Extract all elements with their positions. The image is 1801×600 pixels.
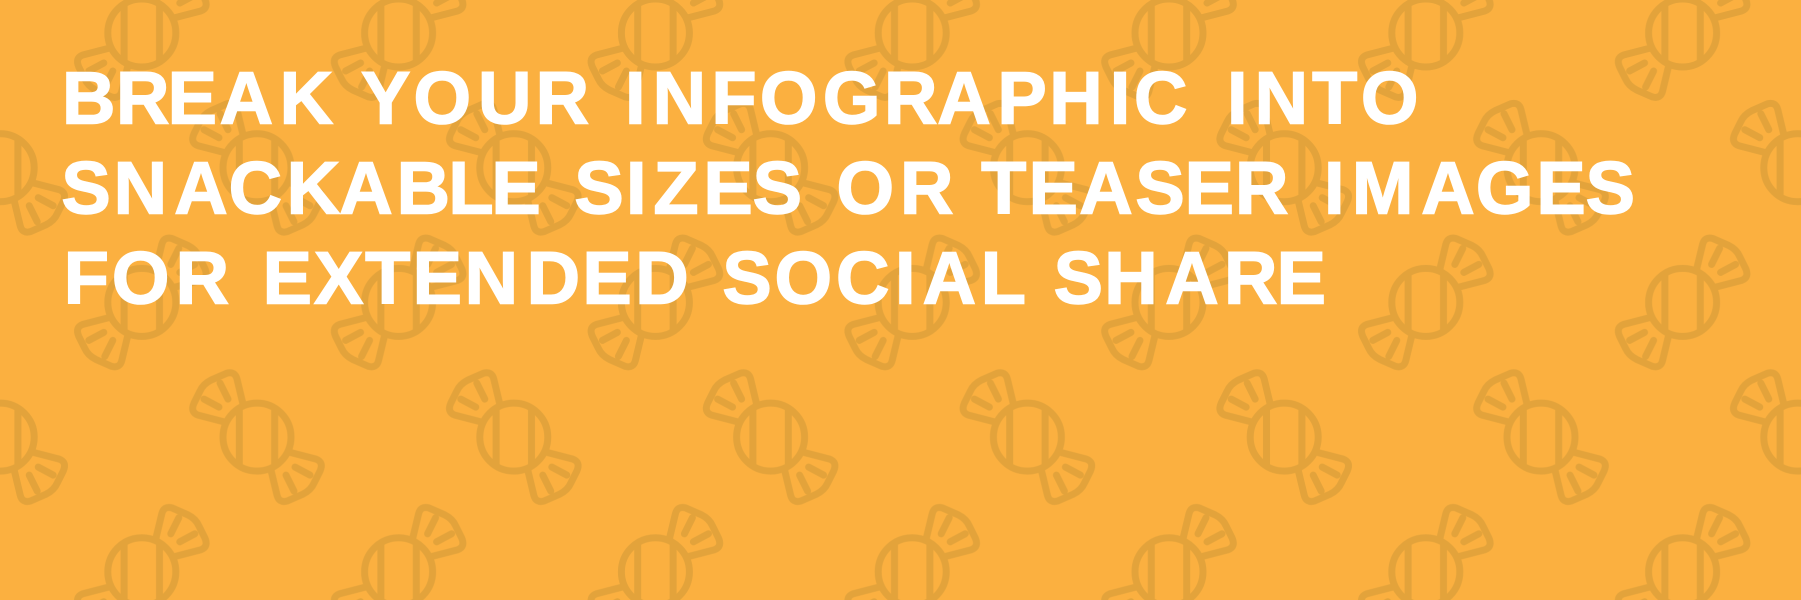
heading: FOR EXTENDED SOCIAL SHARE xyxy=(64,236,1326,319)
heading xyxy=(61,56,1635,319)
heading: SNACKABLE SIZES OR TEASER IMAGES xyxy=(61,146,1635,229)
heading: BREAK YOUR INFOGRAPHIC INTO xyxy=(62,56,1418,139)
